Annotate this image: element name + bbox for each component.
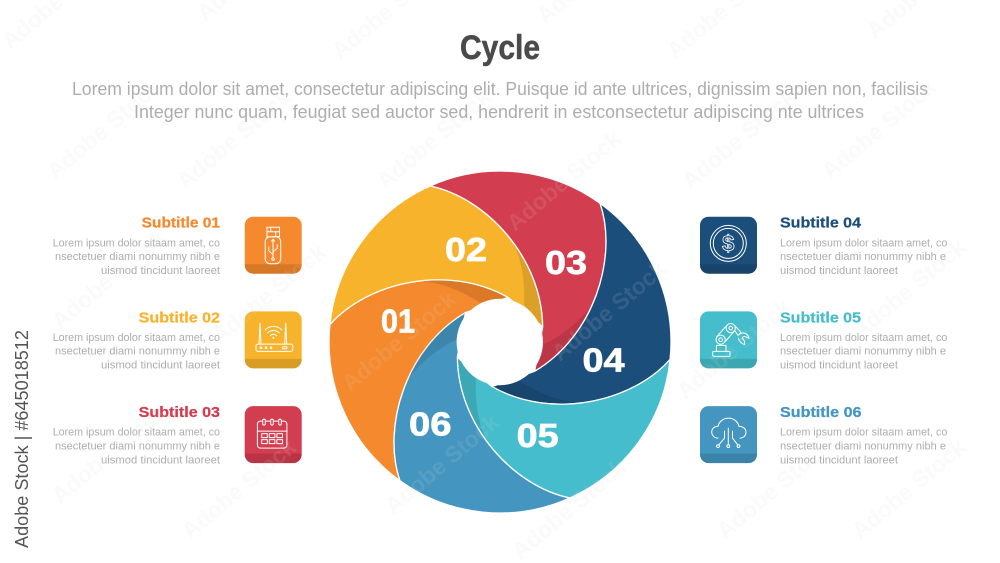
item 03 text: Lorem ipsum dolor sitaam amet, co <box>53 427 220 439</box>
segment 03 red <box>428 117 656 371</box>
watermark overlay: Adobe Stock <box>677 83 801 194</box>
item 04 text: Lorem ipsum dolor sitaam amet, co <box>780 237 947 249</box>
intro paragraph: Lorem ipsum dolor sit amet, consectetur adipiscing elit. Puisque id ante ultrices, dignissim sapien non, facilisis <box>72 78 928 99</box>
item 01 text: Lorem ipsum dolor sitaam amet, co <box>53 237 220 249</box>
item 01 text: nsectetuer diami nonummy nibh e <box>55 251 220 263</box>
segment 04 navy <box>492 202 720 457</box>
item 02 text: Subtitle 02 <box>139 310 220 326</box>
item 01 text: uismod tincidunt laoreet <box>101 265 220 277</box>
watermark overlay: Adobe Stock <box>507 453 631 563</box>
item 05 text: Subtitle 05 <box>780 310 861 326</box>
item 04 text: nsectetuer diami nonummy nibh e <box>780 251 946 263</box>
item 06 text: Lorem ipsum dolor sitaam amet, co <box>780 427 947 439</box>
watermark overlay: Adobe Stock <box>502 125 626 236</box>
item 02 text: nsectetuer diami nonummy nibh e <box>55 346 220 358</box>
segment numbers: 06 <box>409 406 452 443</box>
item 03 text <box>53 405 220 466</box>
segment numbers: 05 <box>517 417 559 454</box>
watermark overlay: Adobe Stock <box>847 233 971 344</box>
centre hole <box>457 299 543 385</box>
item 02 text: uismod tincidunt laoreet <box>101 360 220 372</box>
watermark overlay: Adobe Stock <box>372 83 496 194</box>
item 03 text: Subtitle 03 <box>139 405 220 421</box>
watermark overlay: Adobe Stock <box>177 433 301 544</box>
watermark overlay: Adobe Stock <box>172 83 296 194</box>
icon: calendar <box>245 406 302 463</box>
watermark overlay: Adobe Stock <box>207 238 331 349</box>
stock id side label: Adobe Stock | #645018512 <box>12 330 32 548</box>
icon: robot arm <box>700 311 757 368</box>
icon: dollar coin: $ <box>722 231 734 256</box>
watermark overlay: Adobe Stock <box>847 433 971 544</box>
item 02 text <box>53 310 220 372</box>
segment numbers: 04 <box>582 342 625 379</box>
icon: cloud network <box>700 406 757 463</box>
watermark overlay: Adobe Stock <box>380 408 504 519</box>
item 01 text <box>53 216 220 277</box>
icon: wifi router <box>245 311 302 368</box>
item 06 text: nsectetuer diami nonummy nibh e <box>780 440 946 452</box>
cycle diagram <box>280 117 720 563</box>
watermark overlay: Adobe Stock <box>712 433 836 544</box>
segment numbers: 01 <box>381 303 415 340</box>
segment numbers: 03 <box>545 244 587 281</box>
item 06 text: uismod tincidunt laoreet <box>780 454 898 466</box>
item 03 text: nsectetuer diami nonummy nibh e <box>55 440 220 452</box>
title: Cycle <box>460 29 540 67</box>
item 04 text: Subtitle 04 <box>780 216 861 232</box>
segment 01 orange <box>280 227 508 482</box>
item 06 text: Subtitle 06 <box>780 405 862 421</box>
watermark overlay: Adobe Stock <box>42 73 166 184</box>
icon: dollar coin <box>700 217 757 274</box>
segment numbers: 02 <box>445 231 487 268</box>
item 04 text: uismod tincidunt laoreet <box>780 265 898 277</box>
item 02 text: Lorem ipsum dolor sitaam amet, co <box>53 332 220 344</box>
segment 05 teal <box>457 357 670 498</box>
segment numbers <box>381 231 625 454</box>
watermark overlay: Adobe Stock <box>547 255 671 366</box>
item 01 text: Subtitle 01 <box>142 216 220 232</box>
item 04 text <box>780 216 947 277</box>
icon: usb drive <box>245 217 302 274</box>
item 05 text: Lorem ipsum dolor sitaam amet, co <box>780 332 947 344</box>
segment 02 yellow <box>330 186 543 327</box>
watermark overlay: Adobe Stock <box>817 73 941 184</box>
item 03 text: uismod tincidunt laoreet <box>101 454 220 466</box>
item 05 text: nsectetuer diami nonummy nibh e <box>780 346 946 358</box>
watermark overlay: Adobe Stock <box>672 293 796 404</box>
segment 06 blue <box>344 313 572 563</box>
watermark overlay: Adobe Stock <box>337 285 461 396</box>
watermark overlay: Adobe Stock <box>47 398 171 509</box>
intro paragraph <box>72 78 928 122</box>
watermark overlay: Adobe Stock <box>47 223 171 334</box>
item 05 text <box>780 310 947 372</box>
intro paragraph: Integer nunc quam, feugiat sed auctor sed, hendrerit in estconsectetur adipiscing nte ultrices <box>134 101 864 122</box>
item 05 text: uismod tincidunt laoreet <box>780 360 898 372</box>
item 06 text <box>780 405 947 466</box>
